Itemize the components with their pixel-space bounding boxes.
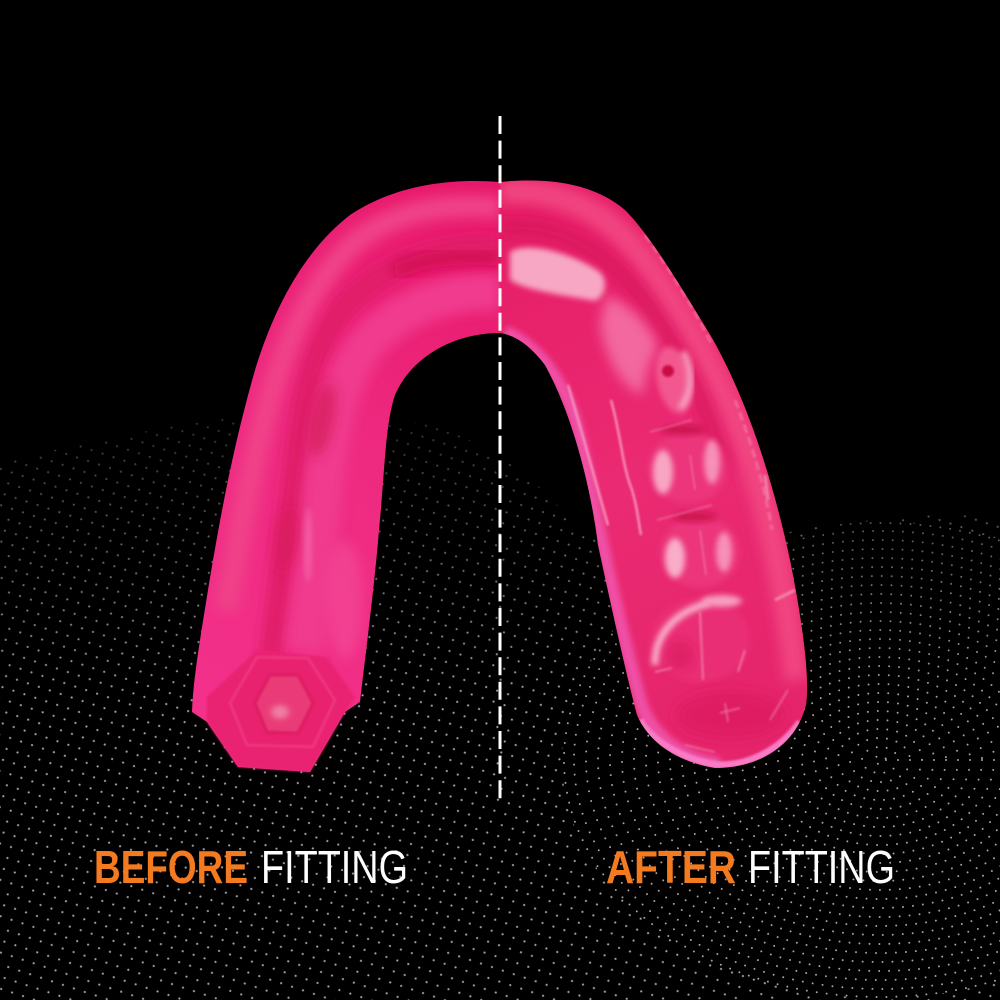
fade on upper terrain [0, 400, 1000, 700]
outer rim tone [500, 191, 796, 680]
dark streaks [395, 257, 500, 272]
tooth: socket [654, 344, 695, 416]
dots: left and lower terrain [0, 400, 1000, 1000]
tooth: molar 3 [650, 595, 750, 682]
bottom glassy edge [640, 720, 800, 765]
word: BEFORE: BEFORE [94, 841, 248, 893]
hexagon end cap [207, 650, 355, 772]
label: after fitting [606, 841, 895, 893]
hexagon boss [255, 675, 313, 733]
word: FITTING: FITTING [261, 841, 408, 893]
word: FITTING: FITTING [748, 841, 895, 893]
glints on inner lip [568, 385, 641, 535]
label: before fitting [94, 841, 408, 893]
center divider dashed line [498, 116, 502, 800]
left arm body [192, 181, 500, 772]
socket dark spot [662, 365, 674, 377]
back wear pattern [680, 695, 780, 734]
right arm body [500, 180, 807, 768]
rough rim glints [645, 235, 772, 530]
tooth: molar 1 [648, 420, 728, 504]
tooth: second imprint [600, 296, 658, 395]
boss highlight [271, 705, 289, 719]
mouthguard: before fitting half [192, 181, 500, 772]
mouthguard: after fitting half [500, 180, 807, 768]
outer rim highlight [226, 206, 500, 610]
dotted wave terrain [0, 400, 1000, 1000]
socket highlight [680, 352, 690, 408]
inner lip [505, 332, 720, 764]
tooth: molar 2 [657, 505, 740, 588]
dots: right terrain rings [564, 523, 1000, 997]
word: AFTER: AFTER [606, 841, 736, 893]
inner channel shading [270, 248, 500, 660]
hexagon inner ring [230, 657, 335, 747]
tooth: front imprint [510, 248, 605, 301]
